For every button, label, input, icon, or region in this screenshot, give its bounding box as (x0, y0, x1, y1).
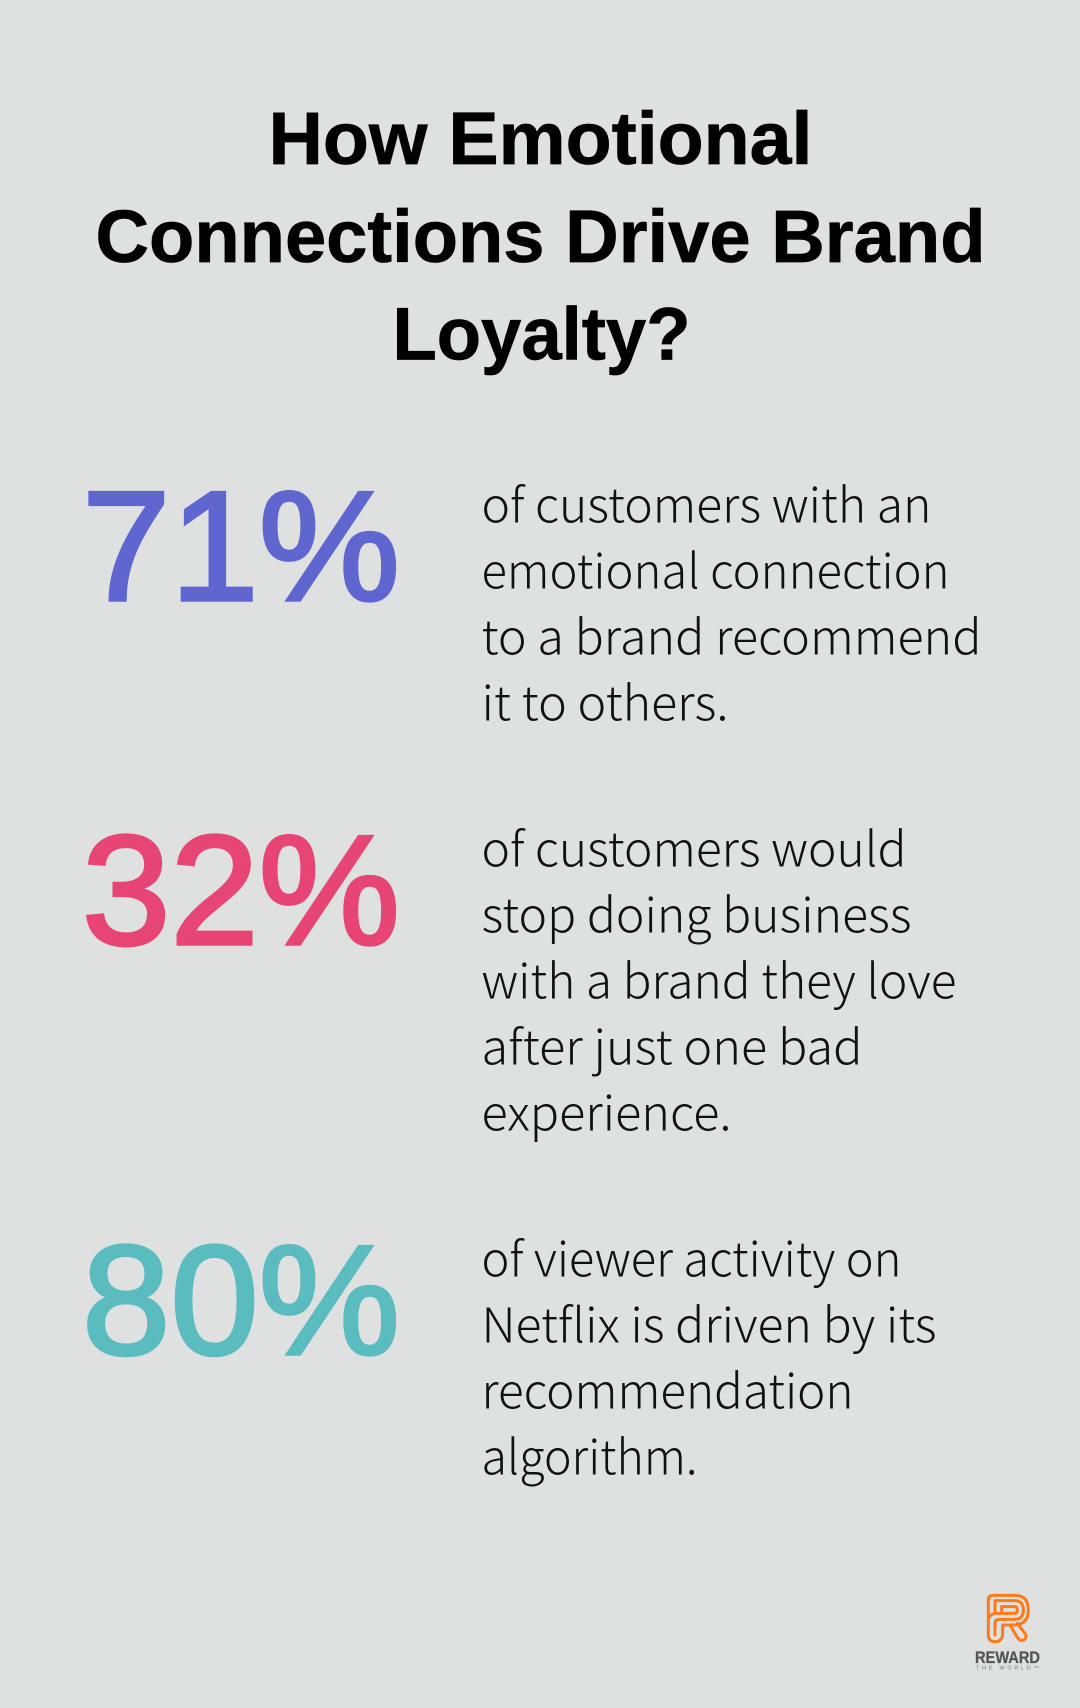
text: 71% description (482, 466, 982, 734)
number: 71%: 71% (82, 460, 400, 634)
title: How Emotional (268, 97, 812, 180)
text: 32% description: experience. (482, 1074, 732, 1144)
logo: Reward the World (975, 1595, 1040, 1672)
title (96, 97, 986, 376)
text: 80% description: recommendation (482, 1352, 854, 1422)
tagline: THE WORLD™ (976, 1666, 1039, 1672)
text: 32% description: after just one bad (482, 1008, 862, 1078)
text: 32% description: with a brand they love (482, 942, 956, 1012)
number: 32%: 32% (82, 804, 400, 978)
text: 32% description: of customers would (482, 810, 906, 880)
title: Loyalty? (392, 292, 690, 376)
text: 71% description: emotional connection (482, 532, 950, 602)
title: Connections Drive Brand (96, 195, 986, 278)
text: 80% description (482, 1220, 936, 1488)
text: 71% description: of customers with an (482, 466, 932, 536)
text: 71% description: it to others. (482, 664, 728, 734)
icon: orange R (988, 1595, 1028, 1642)
stat: 71% (82, 460, 982, 734)
text: 80% description: Netflix is driven by its (482, 1286, 936, 1356)
number: 80%: 80% (82, 1214, 400, 1388)
stat: 80% (82, 1214, 936, 1488)
stat: 32% (82, 804, 956, 1144)
wordmark: REWARD (975, 1648, 1040, 1667)
text: 32% description (482, 810, 956, 1144)
text: 80% description: algorithm. (482, 1418, 698, 1488)
text: 80% description: of viewer activity on (482, 1220, 902, 1290)
text: 71% description: to a brand recommend (482, 598, 982, 668)
text: 32% description: stop doing business (482, 876, 912, 946)
